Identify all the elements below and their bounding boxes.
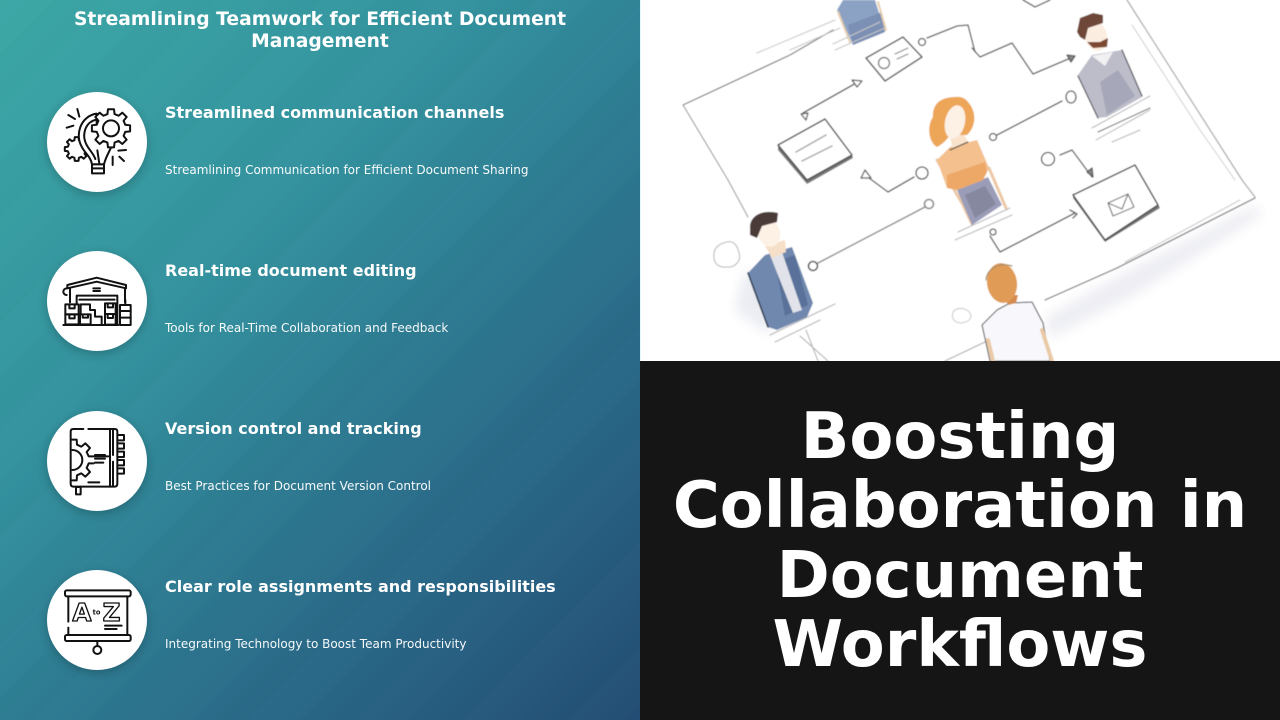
list item: communication — [44, 92, 528, 198]
top right card fragment — [1023, 0, 1050, 7]
main headline: Document — [777, 539, 1143, 613]
figure: woman in orange — [929, 97, 1012, 240]
paper left edge tint — [639, 0, 641, 361]
icon: A to Z projector screen — [47, 570, 147, 670]
sketch content — [640, 0, 1280, 361]
main headline — [673, 400, 1247, 682]
figure: man from behind — [982, 261, 1052, 361]
icon: A to Z projector screen: to — [93, 608, 101, 616]
connector arrows — [714, 25, 1093, 323]
gauge card — [866, 37, 922, 81]
icon: notebook with gear — [47, 411, 147, 511]
icon: light bulb with gears — [47, 92, 147, 192]
main headline: Workflows — [772, 608, 1148, 682]
illustration: team workflow sketch — [640, 0, 1280, 361]
item description: Best Practices for Document Version Control — [165, 479, 431, 493]
item description: Integrating Technology to Boost Team Productivity — [165, 637, 466, 651]
panel heading: Management — [251, 31, 389, 52]
item heading: Clear role assignments and responsibilities — [165, 577, 556, 596]
panel: left teal gradient — [0, 0, 640, 720]
figure: man with beard — [1077, 13, 1150, 142]
item heading: Streamlined communication channels — [165, 103, 504, 122]
item heading: Version control and tracking — [165, 419, 422, 438]
panel heading: Streamlining Teamwork for Efficient Document — [74, 9, 566, 30]
item heading: Real-time document editing — [165, 261, 417, 280]
item description: Tools for Real-Time Collaboration and Feedback — [165, 321, 448, 335]
list item: editing — [44, 250, 448, 358]
panel: dark title block — [640, 361, 1280, 720]
icon: A to Z projector screen: Z — [103, 598, 121, 627]
document card left — [778, 119, 853, 184]
main headline: Collaboration in — [673, 469, 1247, 543]
panel heading — [74, 9, 566, 52]
list item: version control — [44, 411, 431, 517]
icon: warehouse with boxes — [47, 251, 147, 351]
figure: top person — [833, 0, 886, 50]
icon: A to Z projector screen: A — [72, 598, 91, 627]
main headline: Boosting — [801, 400, 1119, 474]
paper sheet outline — [683, 0, 1262, 361]
item description: Streamlining Communication for Efficient Document Sharing — [165, 163, 528, 177]
figure: man in blue jacket — [748, 212, 835, 342]
list item: roles — [44, 570, 556, 676]
mail card — [1073, 165, 1160, 242]
